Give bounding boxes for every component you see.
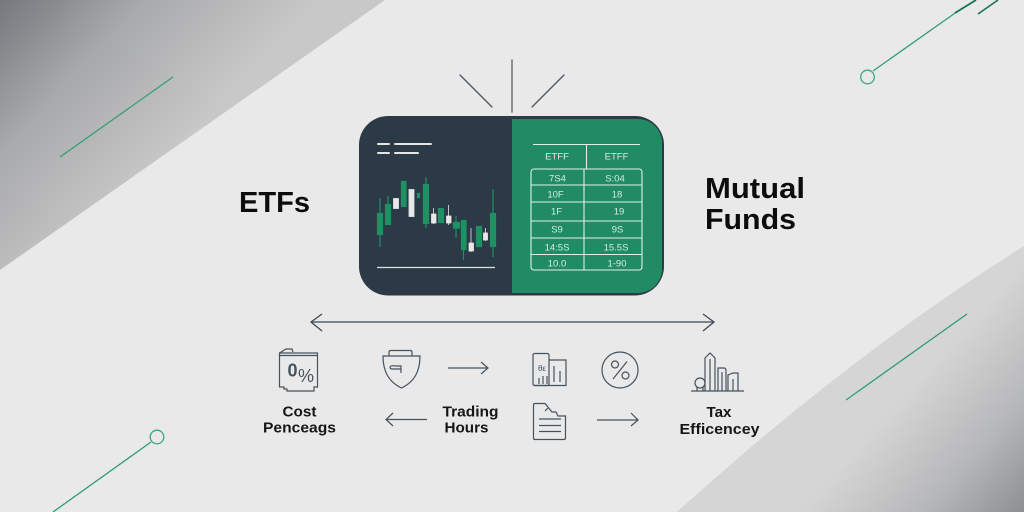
arrow: right, lower (597, 413, 638, 426)
label: Tax Efficencey: Tax (706, 405, 732, 421)
chart header lines (378, 144, 431, 153)
card body (359, 116, 664, 296)
icon: radiating rays (460, 60, 564, 112)
comparison table: 19 (614, 206, 624, 218)
comparison table: 1-90 (607, 258, 627, 270)
comparison table: 1F (551, 206, 562, 218)
comparison table: 10.0 (548, 258, 566, 270)
icon: document (534, 404, 566, 440)
label: Trading Hours: Hours (444, 420, 488, 436)
icon: cost percentage card: % (298, 366, 314, 386)
label: Tax Efficencey: Efficencey (680, 422, 760, 438)
accent node line: top right (861, 0, 998, 84)
icon: financial report chart: θε (538, 364, 546, 373)
icon: buildings skyline (691, 353, 744, 391)
comparison table: 9S (612, 224, 623, 236)
icon: percent circle (602, 352, 638, 388)
comparison table: 14:5S (545, 242, 569, 254)
heading: Mutual Funds: Funds (705, 204, 796, 236)
panel: central comparison card (359, 116, 664, 296)
accent node line: bottom left (53, 430, 164, 512)
comparison table (531, 144, 642, 270)
candlestick chart (378, 177, 496, 260)
arrow: left (386, 413, 427, 426)
comparison table: 18 (612, 190, 622, 200)
background: top-left gray wedge (0, 0, 385, 270)
comparison table: ETFF (545, 152, 569, 162)
double-headed arrow (311, 314, 714, 331)
label: Cost Penceags: Cost (282, 404, 317, 420)
heading: ETFs: ETFs (239, 187, 310, 219)
comparison table: ETFF (605, 152, 629, 162)
icon: financial report chart (533, 354, 566, 386)
icon: cost percentage card (280, 349, 318, 391)
comparison table: 7S4 (549, 174, 566, 184)
background: bottom-right gray wedge (677, 246, 1024, 512)
panel: green table side (512, 119, 662, 293)
icon: cost percentage card: 0 (288, 360, 298, 380)
arrow: right, upper left (448, 362, 488, 374)
comparison table: 10F (547, 190, 564, 200)
heading: Mutual Funds: Mutual (705, 173, 805, 205)
accent line: bottom right (846, 314, 967, 400)
label: Cost Penceags: Penceags (263, 420, 336, 436)
comparison table: S9 (551, 224, 563, 236)
accent line: top left (60, 77, 173, 157)
chart baseline (377, 266, 495, 268)
icon: shield (383, 350, 420, 388)
comparison table: 15.5S (604, 242, 628, 254)
comparison table: S:04 (605, 174, 625, 184)
label: Trading Hours: Trading (442, 404, 498, 420)
